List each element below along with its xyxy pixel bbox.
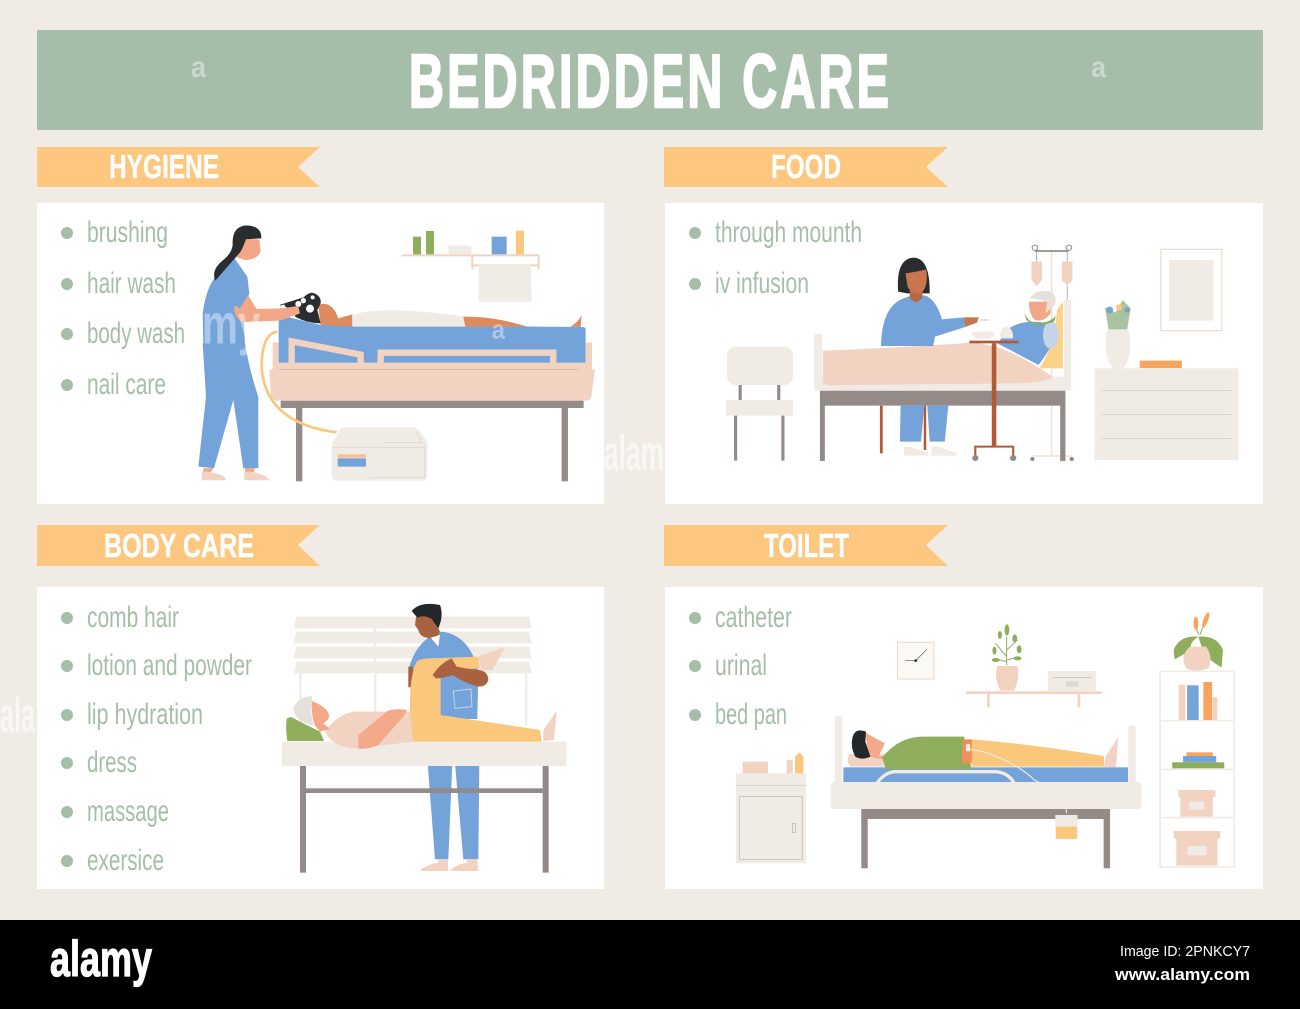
illustration: nurse washing patient hair: my [202, 293, 261, 356]
bed [269, 315, 595, 481]
panel: hygiene [37, 147, 604, 504]
nurse with spoon [881, 258, 989, 456]
illustration: nurse washing patient hair: a [492, 314, 505, 344]
list: body care tasks: dress [87, 746, 137, 779]
list: hygiene tasks: hair wash [87, 267, 176, 300]
title banner [37, 30, 1263, 130]
iv stand [1030, 245, 1074, 461]
list: hygiene tasks [61, 216, 185, 401]
list: toilet tasks: urinal [715, 649, 767, 682]
list: hygiene tasks: brushing [87, 216, 168, 249]
chair [726, 347, 793, 461]
over-bed table with bowl and teapot [969, 326, 1018, 461]
hair washing machine [332, 427, 427, 481]
panel: toilet [664, 525, 1263, 889]
list: toilet tasks [689, 601, 792, 731]
footer bar [0, 920, 1300, 1009]
list: toilet tasks: catheter [715, 601, 792, 634]
watermark fragment left: ala [0, 687, 36, 743]
ribbon: body care [37, 525, 320, 566]
patient lying on bed [279, 293, 582, 327]
list: food tasks: iv infusion [715, 267, 809, 300]
list: body care tasks [61, 601, 252, 877]
list: body care tasks: lotion and powder [87, 649, 252, 682]
therapist [408, 604, 479, 871]
picture frame [1161, 249, 1222, 331]
list: body care tasks: lip hydration [87, 698, 203, 731]
title banner: a [1091, 51, 1106, 84]
patient on massage table [282, 647, 566, 873]
list: hygiene tasks: nail care [87, 368, 166, 401]
wall shelf with towel [402, 231, 539, 302]
illustration: carer exercising patient leg [282, 604, 566, 873]
blanket [823, 343, 1052, 385]
list: body care tasks: massage [87, 795, 169, 828]
watermark fragment between panels: alam [604, 425, 664, 481]
dresser with vase and book [1095, 300, 1238, 460]
nurse [198, 225, 300, 480]
list: toilet tasks: bed pan [715, 698, 787, 731]
bed [831, 716, 1141, 868]
bed frame [814, 300, 1071, 461]
window blinds [294, 617, 532, 725]
panel: body care [37, 525, 604, 889]
ribbon: hygiene [37, 147, 320, 187]
ribbon: toilet [664, 525, 948, 566]
list: food tasks: through mounth [715, 216, 862, 249]
bedside cabinet [736, 752, 806, 863]
wall shelf with plant and box [966, 624, 1102, 707]
illustration: nurse feeding patient [726, 245, 1238, 461]
ribbon: toilet: TOILET [764, 527, 849, 564]
list: hygiene tasks: body wash [87, 317, 185, 350]
image id: Image ID: 2PNKCY7 [1120, 943, 1250, 960]
illustration: nurse washing patient hair [198, 225, 595, 481]
ribbon: hygiene: HYGIENE [109, 148, 219, 185]
logo: alamy [50, 931, 152, 987]
catheter tube and urine bag [966, 744, 1078, 839]
title banner: BEDRIDDEN CARE [409, 40, 892, 124]
list: food tasks [689, 216, 862, 300]
patient lying down [848, 730, 1118, 769]
panel: food [664, 147, 1263, 504]
tube to washing machine [262, 332, 337, 432]
title banner: a [191, 51, 206, 84]
bookshelf with plant [1160, 612, 1234, 867]
ribbon: food [664, 147, 948, 187]
website: www.alamy.com [1114, 965, 1250, 984]
ribbon: food: FOOD [771, 148, 841, 185]
patient with pillow [997, 291, 1063, 368]
wall clock [897, 642, 934, 679]
list: body care tasks: comb hair [87, 601, 179, 634]
list: body care tasks: exersice [87, 844, 164, 877]
ribbon: body care: BODY CARE [104, 527, 254, 564]
illustration: patient with catheter [736, 612, 1234, 868]
